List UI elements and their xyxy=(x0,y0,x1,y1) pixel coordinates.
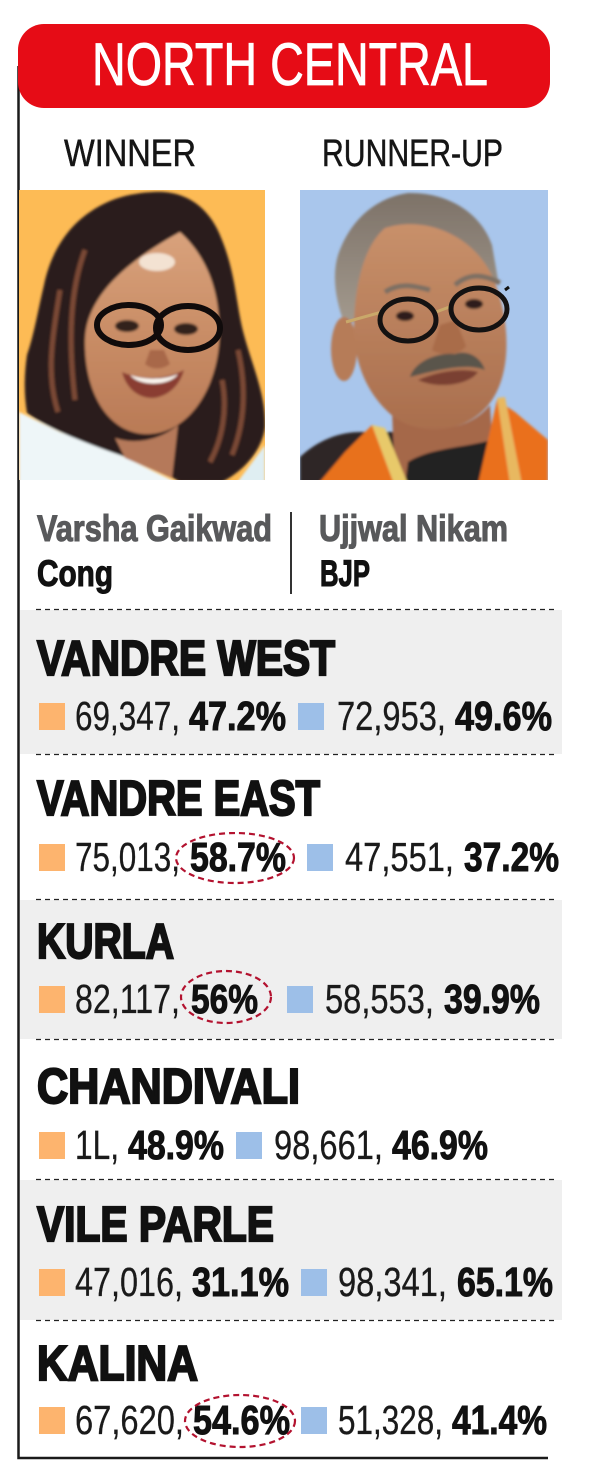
title banner: NORTH CENTRAL xyxy=(92,31,488,98)
panel: Chandivali: 48.9% xyxy=(128,1122,224,1168)
panel: Kurla: 39.9% xyxy=(444,976,540,1022)
caption: winner name and party: Cong xyxy=(37,553,113,594)
panel: Kurla: 56% xyxy=(191,976,258,1022)
panel: Vandre West: VANDRE WEST xyxy=(37,632,335,686)
panel: Kurla: KURLA xyxy=(37,915,174,969)
panel: Chandivali xyxy=(37,1060,488,1168)
panel: Vandre East: 58.7% xyxy=(190,834,286,880)
panel: Kurla xyxy=(20,900,562,1040)
panel: Vandre East: 47,551, xyxy=(345,834,454,880)
panel: Vile Parle: VILE PARLE xyxy=(37,1198,274,1252)
panel: Vile Parle: 31.1% xyxy=(192,1259,289,1305)
panel: Kalina xyxy=(37,1337,547,1447)
label: runner-up: RUNNER-UP xyxy=(322,133,503,175)
panel: Kalina: 54.6% xyxy=(193,1397,290,1443)
panel: Vandre West: 72,953, xyxy=(337,693,446,739)
photo: winner portrait xyxy=(19,190,265,484)
panel: Chandivali: CHANDIVALI xyxy=(37,1060,300,1114)
panel: Vile Parle: 47,016, xyxy=(75,1259,183,1305)
caption: runner-up name and party xyxy=(319,508,508,594)
caption: runner-up name and party: BJP xyxy=(320,553,370,594)
panel: Vandre West xyxy=(20,610,562,754)
panel: Kurla: 58,553, xyxy=(325,976,434,1022)
title banner xyxy=(18,24,550,108)
panel: Vandre West: 69,347, xyxy=(75,693,180,739)
panel: Kalina: 41.4% xyxy=(452,1397,547,1443)
panel: Vile Parle xyxy=(20,1180,562,1320)
panel: Kurla: 82,117, xyxy=(75,976,180,1022)
caption: runner-up name and party: Ujjwal Nikam xyxy=(319,508,508,549)
panel: Vandre West: 47.2% xyxy=(189,693,286,739)
panel: Chandivali: 1L, xyxy=(75,1122,119,1168)
panel: Kalina: KALINA xyxy=(37,1337,198,1391)
panel: Vile Parle: 98,341, xyxy=(338,1259,447,1305)
panel: Chandivali: 98,661, xyxy=(274,1122,383,1168)
panel: Kalina: 51,328, xyxy=(338,1397,443,1443)
panel: Kalina: 67,620, xyxy=(75,1397,184,1443)
panel: Vandre East: 37.2% xyxy=(464,834,559,880)
label: winner: WINNER xyxy=(64,133,196,175)
divider between candidates xyxy=(290,512,292,594)
panel: Vandre West: 49.6% xyxy=(455,693,552,739)
panel: Vandre East: VANDRE EAST xyxy=(37,772,320,826)
caption: winner name and party xyxy=(37,508,272,594)
panel: Chandivali: 46.9% xyxy=(392,1122,488,1168)
panel: Vandre East: 75,013, xyxy=(75,834,180,880)
photo: runner-up portrait xyxy=(300,190,548,484)
panel: Vandre East xyxy=(37,772,559,883)
caption: winner name and party: Varsha Gaikwad xyxy=(37,508,272,549)
panel: Vile Parle: 65.1% xyxy=(457,1259,553,1305)
